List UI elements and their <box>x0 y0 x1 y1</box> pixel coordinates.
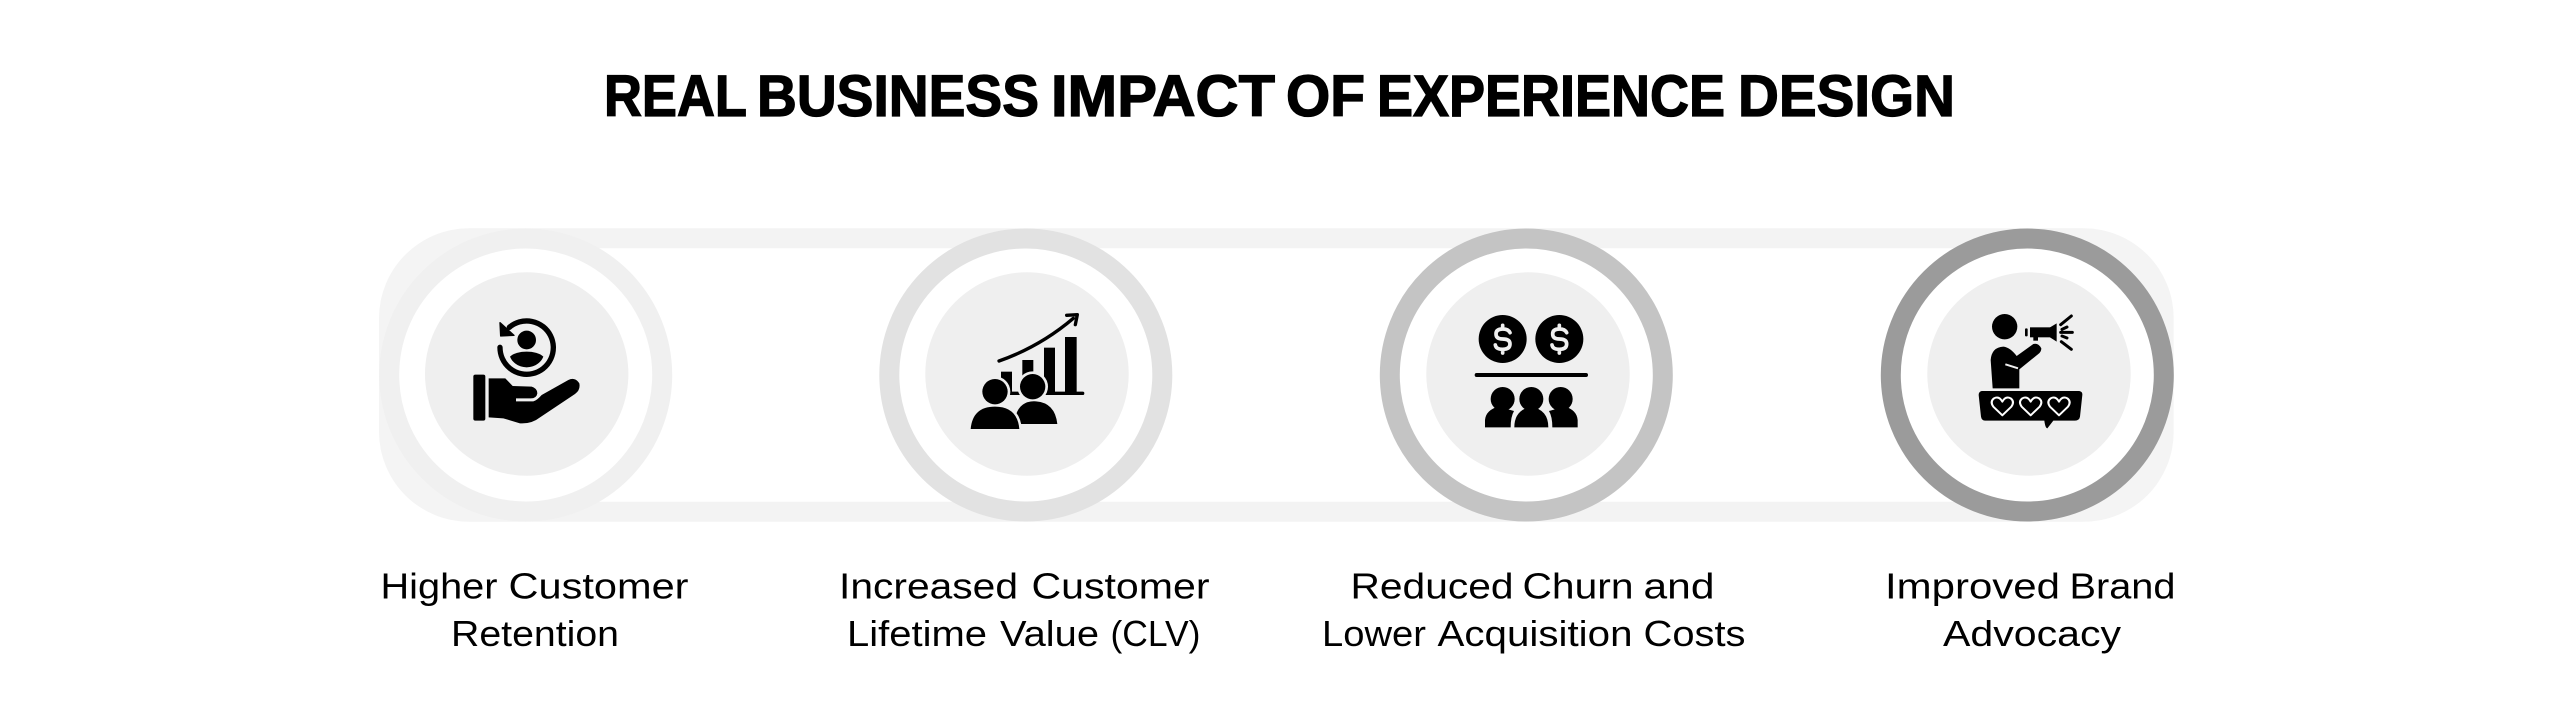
label 3: Costs <box>1644 613 1746 654</box>
disc 4 <box>1927 272 2131 476</box>
icon: hand holding returning customer <box>473 321 580 423</box>
ring 2 <box>889 238 1162 512</box>
title: DESIGN <box>1738 64 1955 129</box>
label 3: Churn <box>1522 565 1634 606</box>
title: EXPERIENCE <box>1377 64 1725 129</box>
label 1: Retention <box>451 613 619 654</box>
panel: improved brand advocacy <box>1885 238 2176 654</box>
panel: increased customer lifetime value <box>839 238 1210 654</box>
label 3: Acquisition <box>1438 613 1632 654</box>
label 4: Advocacy <box>1943 613 2122 654</box>
ring 1 <box>389 238 662 512</box>
label 2: Value <box>1000 613 1099 654</box>
label 3: Reduced <box>1350 565 1514 606</box>
icon: coins above customers <box>1477 315 1586 427</box>
label 4: Improved <box>1885 565 2060 606</box>
title: OF <box>1286 64 1365 129</box>
label 1: Higher <box>380 565 498 606</box>
title: REAL <box>604 64 747 129</box>
label 3 <box>1322 565 1746 654</box>
disc 2 <box>925 272 1129 476</box>
label 1: Customer <box>508 565 688 606</box>
title: BUSINESS <box>757 64 1039 129</box>
label 4: Brand <box>2070 565 2176 606</box>
label 2: (CLV) <box>1110 613 1200 654</box>
label 2: Increased <box>839 565 1018 606</box>
ring 4 <box>1891 238 2164 512</box>
label 2: Customer <box>1032 565 1210 606</box>
label 2: Lifetime <box>847 613 987 654</box>
icon: advocate with megaphone and hearts <box>1979 314 2082 428</box>
title <box>604 64 1955 129</box>
disc 1 <box>425 272 628 476</box>
disc 3 <box>1426 272 1630 476</box>
label 1 <box>380 565 688 654</box>
label 4 <box>1885 565 2176 654</box>
label 3: and <box>1644 565 1714 606</box>
title: IMPACT <box>1051 64 1275 129</box>
icon: customers and growth chart <box>968 315 1083 430</box>
label 2 <box>839 565 1210 654</box>
label 3: Lower <box>1322 613 1426 654</box>
connecting track <box>379 228 2174 522</box>
ring 3 <box>1390 238 1663 512</box>
panel: reduced churn and lower acquisition costs <box>1322 238 1746 654</box>
panel: higher customer retention <box>380 238 688 654</box>
